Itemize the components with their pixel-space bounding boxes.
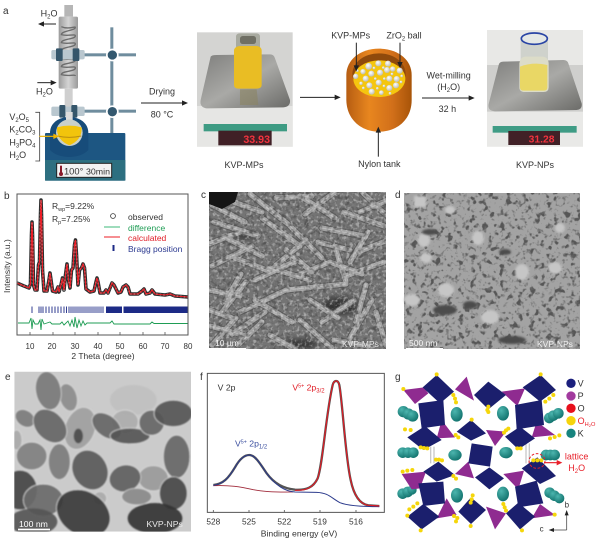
panel f: XPS spectrum [206,373,384,539]
atom legend: 2 [589,423,592,428]
legend [104,212,183,254]
atom legend [566,379,596,438]
wet-milling arrow and conditions: 32 h [439,104,456,114]
scale bar: 100 nm [19,519,48,529]
condenser [59,5,78,112]
lattice water label [565,451,588,475]
balance reading: 31.28 [529,135,555,146]
water inlet label and arrow: H [36,87,42,97]
baseline [213,486,293,492]
legend: calculated [128,233,167,243]
crystal axes [540,501,570,534]
legend: difference [128,223,165,233]
wet-milling arrow and conditions: 2 [447,88,451,94]
fit factors: =7.25% [61,214,91,224]
spectrum name: V 2p [218,383,236,393]
crystal axes: b [565,501,570,510]
clamp knob upper [106,49,119,61]
reagents list: PO [19,137,32,147]
water inlet label and arrow: O [46,87,53,97]
panel label f: f [200,372,203,383]
x axis tick labels: 10 [26,342,35,351]
wet-milling arrow and conditions: Wet-milling [427,71,471,81]
x axis tick labels: 80 [184,342,193,351]
heating mantle [50,117,88,157]
blue fit component [213,455,379,507]
clamp knob lower [106,105,119,118]
zirconia balls [353,60,403,95]
y axis title: Intensity (a.u.) [2,239,12,293]
x axis tick labels: 525 [242,517,256,527]
panel label d: d [395,190,401,201]
vial with pale yellow powder [519,33,549,92]
x axis title: Binding energy (eV) [261,529,337,539]
plot frame [17,194,188,335]
reagents list: CO [19,125,32,135]
bright particles [404,196,565,324]
phosphate tetrahedra [402,377,555,529]
hot plate base [45,133,125,181]
panel label g: g [395,372,401,383]
atom legend: O [578,404,585,414]
tank labels and pointers: 2 [402,36,406,42]
water inlet label and arrow: 2 [42,93,46,99]
fit factors: R [52,201,58,211]
atom legend: P [578,391,584,401]
tank labels and pointers: KVP-MPs [331,30,371,40]
panel label c: c [201,190,206,201]
display: 30min [86,168,110,177]
measured points [213,381,379,506]
reagents list: K [9,125,15,135]
peak label blue: V [235,439,241,449]
vial with yellow powder [234,33,262,105]
atom legend: K [578,428,584,438]
scale bar [406,338,443,350]
atom legend: V [578,379,584,389]
x axis title: 2 Theta (degree) [71,351,135,361]
difference curve [18,317,188,330]
water oxygen atoms [401,372,561,532]
water outlet label and arrow: 2 [47,15,51,21]
panel d: SEM image of KVP-NPs [404,193,580,350]
reagents list: V [9,112,15,122]
peak label red: 5+ [298,383,304,389]
x axis tick labels: 40 [94,342,103,351]
reagents list: 3 [16,143,20,149]
legend: observed [128,212,163,222]
x axis tick labels [26,342,193,351]
nanoparticles [14,372,191,532]
plot frame [207,373,384,512]
label KVP-NPs: KVP-NPs [516,160,555,170]
potassium spheres [397,406,564,503]
calculated curve [17,200,188,297]
x axis tick labels: 516 [349,517,363,527]
panel label a: a [3,6,9,17]
water inlet label and arrow [36,80,57,99]
x axis tick labels: 519 [313,517,327,527]
display: 100° [64,167,84,177]
yellow reagent arrow [39,134,59,139]
x axis tick labels: 30 [71,342,80,351]
reagents list: 3 [32,131,36,137]
sample label: KVP-NPs [146,519,184,529]
upper clamp [51,48,85,61]
legend: Bragg position [128,244,183,254]
vanadium octahedra [407,375,556,529]
x axis tick labels: 70 [161,342,170,351]
panel e: TEM image of KVP-NPs [14,372,191,532]
reagents list: O [19,150,26,160]
arrow from photo to tank [300,95,341,100]
x axis ticks [213,510,356,512]
display [57,163,112,177]
panel g: crystal structure [397,372,596,534]
x axis tick labels: 522 [277,517,292,527]
balance reading: 33.93 [243,134,270,146]
panel label e: e [5,372,11,383]
atom legend: H [585,422,596,428]
fit factors: =9.22% [65,201,95,211]
drying arrow and conditions: Drying [149,87,175,97]
scale bar: 10 µm [215,338,239,348]
sample label: KVP-MPs [342,339,379,349]
lattice water marker [529,454,545,468]
reagents list: O [19,112,26,122]
flask [56,112,83,146]
drying arrow and conditions: 80 °C [151,109,174,119]
x axis tick labels [206,517,363,527]
red fit component [295,381,379,506]
x axis tick labels: 528 [206,517,221,527]
reagents list: 4 [32,143,36,149]
lower clamp [51,105,85,118]
lattice water arrow [544,460,562,465]
peak label red: 2p [304,383,316,393]
reagents list [9,112,40,162]
tank labels and pointers: ball [405,30,422,40]
atom legend: O [578,416,585,426]
wet-milling arrow and conditions [422,71,475,114]
x axis tick labels: 20 [48,342,57,351]
tank labels and pointers [331,30,422,169]
fit factors: R [52,214,58,224]
nylon tank with milling balls [346,49,412,132]
water outlet label and arrow [38,9,58,27]
scale bar [209,338,246,350]
reagents list: H [9,137,16,147]
Bragg positions [32,306,103,313]
x axis tick labels: 60 [139,342,148,351]
panel c: SEM image of KVP-MPs [209,192,388,350]
lattice water label: lattice [565,451,588,461]
reagents list: H [9,150,16,160]
peak label red: V [292,383,298,393]
panel a: reflux synthesis apparatus [9,5,136,181]
lattice guide lines [431,443,529,463]
lattice water label: H [568,463,575,473]
panel a: photo of KVP-MPs on balance [197,32,293,147]
crystal axes: c [540,525,544,534]
rod crystals [209,192,388,350]
reagents list: 2 [15,131,19,137]
x axis tick labels: 50 [116,342,125,351]
stand rods [75,27,136,134]
wet-milling arrow and conditions: O) [450,82,460,92]
lattice water label: 2 [575,469,579,475]
panel a: photo of KVP-NPs on balance [487,30,583,147]
peak label blue: 5+ [241,439,247,445]
reagents list: 5 [26,118,30,124]
peak label red: 3/2 [316,389,325,395]
observed points [17,200,188,297]
fit factors: wp [57,207,65,213]
dark gaps [422,229,526,344]
reagents list: 2 [16,156,20,162]
tank labels and pointers: ZrO [386,30,402,40]
wet-milling arrow and conditions: (H [437,82,447,92]
panel label b: b [4,191,10,202]
peak label blue: 2p [247,439,259,449]
panel b: XRD refinement plot [2,194,193,361]
label KVP-MPs: KVP-MPs [224,160,264,170]
water outlet label and arrow: O [51,9,58,19]
particle texture [404,193,580,349]
atom legend: O [591,422,596,428]
fit factors [52,201,95,226]
tank labels and pointers: Nylon tank [358,159,401,169]
peak label blue: 1/2 [259,445,268,451]
reagents list: 2 [15,118,19,124]
dark voids [231,233,358,349]
water outlet label and arrow: H [41,9,47,19]
scale bar: 500 nm [409,338,437,348]
drying arrow and conditions [141,87,188,119]
lattice water label: O [578,463,585,473]
x axis ticks [30,332,188,335]
sample label: KVP-NPs [537,339,573,349]
fit factors: p [58,220,61,226]
SEM texture [209,192,386,349]
